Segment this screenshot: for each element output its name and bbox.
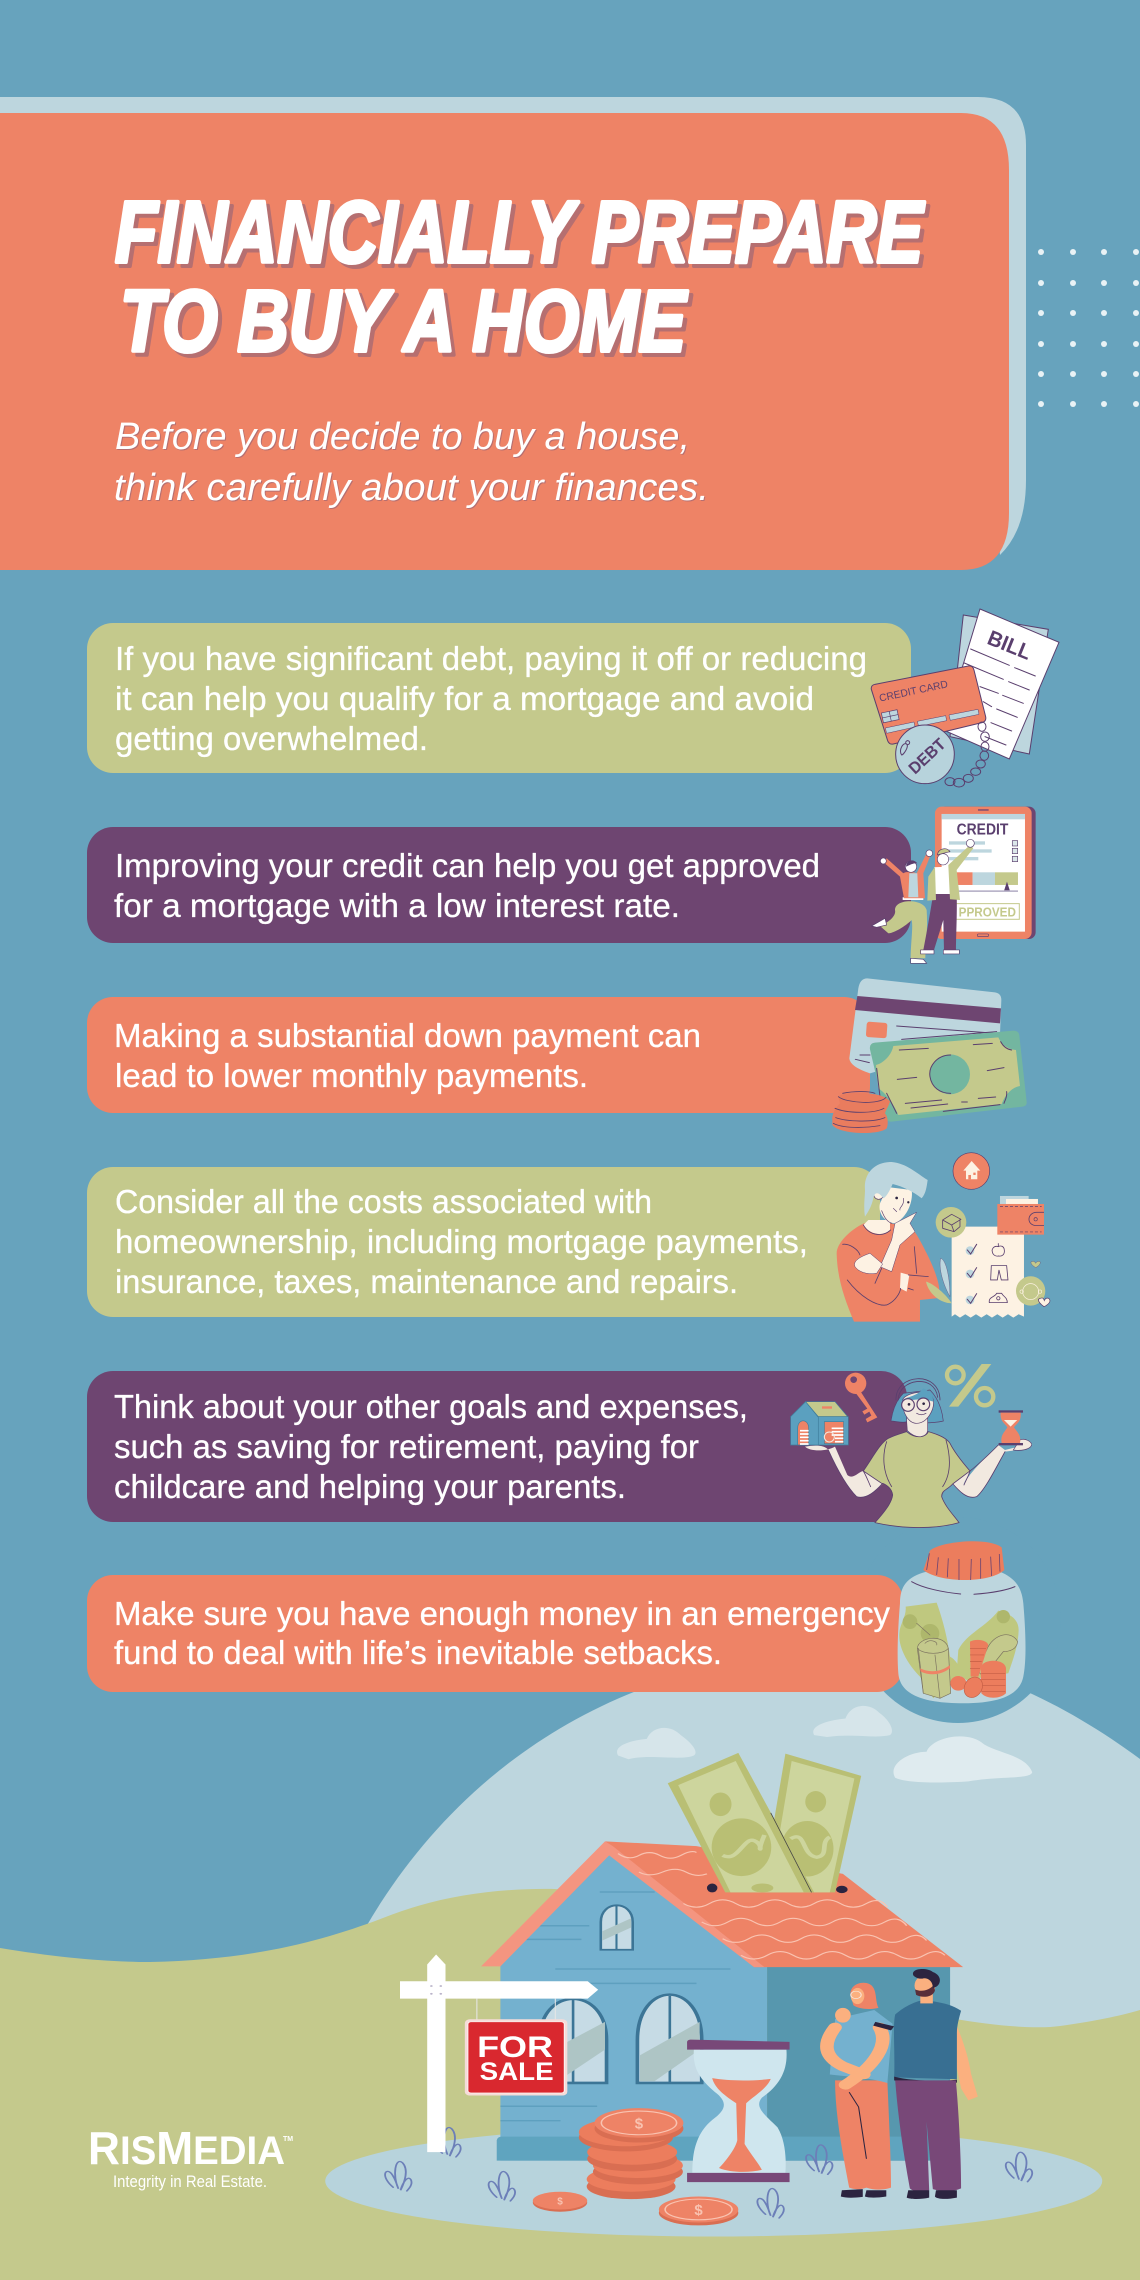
card 1 text: getting overwhelmed.: [115, 720, 428, 757]
background hill: [330, 1650, 1140, 2100]
clouds: [617, 1706, 1032, 1783]
man celebrating: [921, 839, 974, 954]
card 4 text: insurance, taxes, maintenance and repairs.: [115, 1263, 738, 1300]
title: FINANCIALLY PREPARE: [115, 184, 925, 281]
coin stack: $: [635, 2115, 644, 2132]
title: TO BUY A HOME: [120, 273, 688, 370]
card 3 text: [114, 1017, 701, 1094]
bills: [668, 1753, 861, 1892]
icon: woman balancing house and hourglass: [791, 1364, 1032, 1528]
for sale sign: [465, 2019, 567, 2096]
card 4 text: [115, 1183, 808, 1300]
card 2 text: for a mortgage with a low interest rate.: [114, 887, 680, 924]
for sale sign: FOR: [477, 2031, 553, 2064]
panel: header: [0, 113, 1009, 570]
hourglass: [687, 2040, 790, 2182]
card 1 text: If you have significant debt, paying it off or reducing: [115, 640, 867, 677]
green ground: [0, 1889, 1140, 2280]
logo: RisMedia: RISMEDIA: [88, 2122, 285, 2174]
subtitle: Before you decide to buy a house,: [115, 416, 690, 458]
card 1 text: [115, 640, 867, 757]
card 1 text: it can help you qualify for a mortgage and avoid: [115, 680, 814, 717]
card 4: costs: [87, 1167, 880, 1317]
panel: header back layer: [0, 97, 1026, 555]
woman: [827, 1983, 894, 2198]
ground ellipse: [325, 2126, 1102, 2236]
subtitle: think carefully about your finances.: [115, 468, 710, 510]
card 3 text: lead to lower monthly payments.: [115, 1057, 588, 1094]
subtitle: [114, 416, 710, 510]
title: TO BUY A HOME: [124, 277, 692, 374]
man: [894, 1969, 978, 2199]
icon: credit tablet and couple: PPROVED: [959, 905, 1016, 919]
dot pattern: [1038, 249, 1139, 407]
icon: bill, credit card and debt ball: BILL: [984, 626, 1035, 665]
icon: credit tablet and couple: CREDIT: [957, 821, 1009, 838]
card 2 text: Improving your credit can help you get approved: [115, 847, 820, 884]
icon: credit tablet and couple: [872, 807, 1036, 963]
card 6 text: fund to deal with life’s inevitable setbacks.: [114, 1634, 722, 1671]
card 3: down payment: [87, 997, 870, 1113]
card 3 text: Making a substantial down payment can: [114, 1017, 701, 1054]
card 1: debt: [87, 623, 911, 773]
roof: [481, 1841, 963, 1967]
card 5: other goals: [87, 1371, 907, 1522]
card 6 text: [114, 1595, 890, 1671]
logo: RisMedia: Integrity in Real Estate.: [113, 2172, 267, 2191]
arched windows: [540, 1995, 702, 2083]
loose coins: $: [557, 2196, 563, 2207]
house walls: [497, 1850, 950, 2161]
hill cut-out behind jar: [855, 1517, 1061, 1723]
card 5 text: childcare and helping your parents.: [114, 1468, 626, 1505]
title: [115, 184, 929, 374]
small window: [601, 1905, 633, 1950]
coin stack: [579, 2108, 683, 2199]
for sale sign: SALE: [480, 2058, 554, 2086]
subtitle: think carefully about your finances.: [114, 467, 709, 509]
logo: RisMedia: TM: [283, 2136, 293, 2143]
subtitle: Before you decide to buy a house,: [116, 417, 691, 459]
icon: savings jar: [898, 1541, 1026, 1703]
title: FINANCIALLY PREPARE: [119, 188, 929, 285]
card 5 text: [114, 1388, 748, 1505]
loose coins: [533, 2192, 738, 2225]
scene: house with money, couple and for sale sign: [325, 1706, 1102, 2236]
card 4 text: homeownership, including mortgage payments,: [115, 1223, 808, 1260]
icon: bill, credit card and debt ball: [871, 609, 1059, 787]
card 2 text: [114, 847, 820, 924]
for sale sign post: [400, 1955, 598, 2152]
woman celebrating: [872, 850, 933, 963]
card 6: emergency fund: [87, 1575, 903, 1692]
icon: thinking person with checklist: [837, 1153, 1050, 1322]
plants: [385, 2127, 1032, 2218]
icon: bill, credit card and debt ball: DEBT: [905, 734, 949, 778]
icon: bill, credit card and debt ball: CREDIT CARD: [878, 679, 949, 705]
icon: credit card and cash: [832, 978, 1027, 1133]
loose coins: $: [694, 2202, 703, 2219]
card 2: credit: [87, 827, 911, 943]
card 5 text: Think about your other goals and expenses,: [114, 1388, 748, 1425]
card 5 text: such as saving for retirement, paying for: [114, 1428, 699, 1465]
card 6 text: Make sure you have enough money in an emergency: [114, 1595, 890, 1632]
card 4 text: Consider all the costs associated with: [115, 1183, 652, 1220]
